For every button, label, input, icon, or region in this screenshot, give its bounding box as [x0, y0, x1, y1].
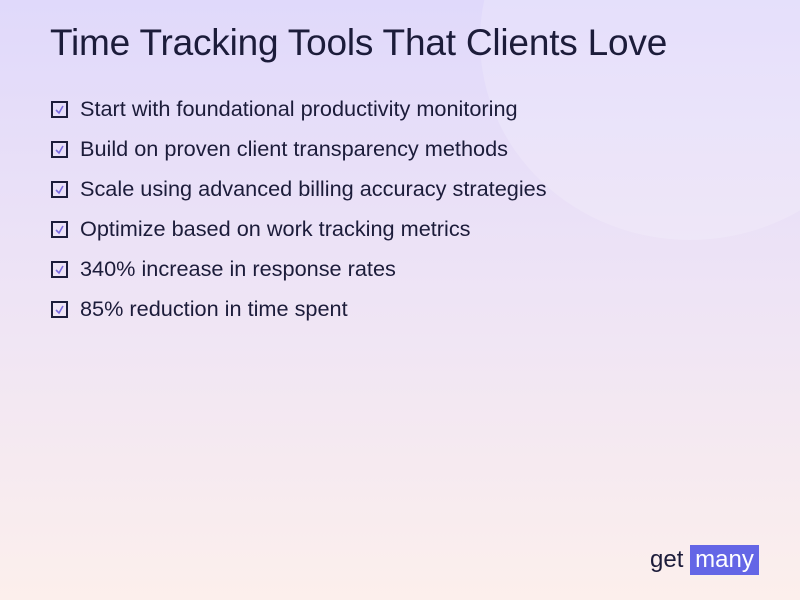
item 5: 340% increase in response rates [80, 256, 396, 281]
logo [650, 545, 759, 575]
item 2: Build on proven client transparency methods [80, 136, 508, 161]
item 3: Scale using advanced billing accuracy strategies [80, 176, 547, 201]
title: Time Tracking Tools That Clients Love [50, 22, 667, 63]
logo: get [650, 546, 683, 573]
logo: many [695, 546, 754, 573]
item 4: Optimize based on work tracking metrics [80, 216, 471, 241]
item 1: Start with foundational productivity monitoring [80, 96, 518, 121]
item 6: 85% reduction in time spent [80, 296, 348, 321]
